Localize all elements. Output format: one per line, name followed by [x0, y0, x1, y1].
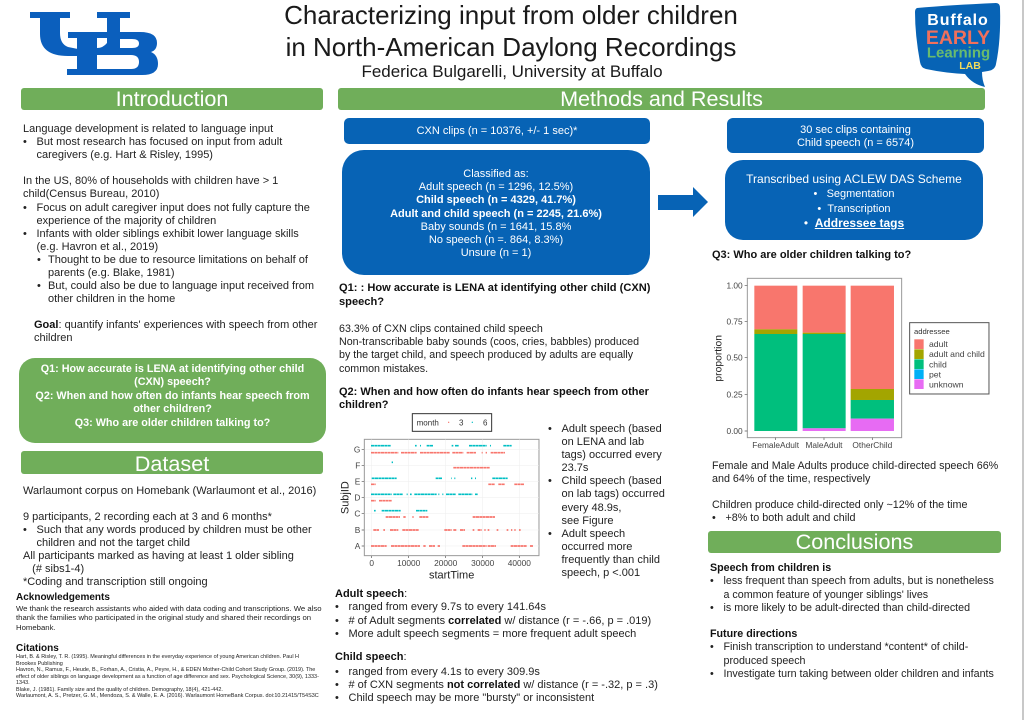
callout: research questions: Q2: When and how often do infants hear speech from — [35, 390, 310, 402]
legend: addressee: addressee — [914, 327, 950, 336]
text block: child speech: Child speech may be more "bursty" or inconsistent — [348, 692, 594, 704]
text block: introduction: caregivers (e.g. Hart & Risley, 1995) — [36, 149, 213, 161]
text block: chart notes: occurred more — [562, 541, 632, 553]
text block: chart notes: on lab tags) occurred — [562, 488, 665, 500]
text block: speech from children: is more likely to be adult-directed than child-directed — [724, 602, 970, 614]
scatter chart: speech by subject over time: 20000 — [434, 558, 458, 568]
text block: introduction: Thought to be due to resource limitations on behalf of — [48, 254, 308, 266]
text block: dataset: children and not the target child — [36, 537, 190, 549]
scatter chart: speech by subject over time: G — [354, 444, 360, 454]
box: 30 sec clips: Child speech (n = 6574) — [797, 137, 914, 149]
scatter chart: speech by subject over time: startTime — [429, 569, 474, 581]
box: classification: Baby sounds (n = 1641, 15.8% — [421, 221, 571, 233]
text block: introduction: child(Census Bureau, 2010) — [23, 188, 159, 200]
box: 30 sec clips — [727, 118, 984, 153]
scatter chart: speech by subject over time: A — [355, 541, 361, 551]
text block: chart notes: Adult speech — [562, 528, 625, 540]
box: classification: Child speech (n = 4329, 41.7%) — [416, 194, 576, 206]
scatter chart: speech by subject over time: E — [355, 477, 361, 487]
text block: speech from children: a common feature of younger siblings' lives — [724, 589, 928, 601]
heading: Q3: Q3: Who are older children talking to? — [712, 249, 911, 261]
box: classification: Adult speech (n = 1296, 12.5%) — [419, 181, 573, 193]
bar chart: addressee proportion: OtherChild — [852, 440, 893, 450]
text block: child speech: # of CXN segments not correlated w/ distance (r = -.32, p = .3) — [348, 679, 658, 691]
text block: chart notes: on LENA and lab — [562, 436, 644, 448]
heading: Citations: Citations — [16, 643, 59, 654]
text block: citations: 1343. — [16, 680, 30, 686]
scatter chart: speech by subject over time: 10000 — [397, 558, 421, 568]
text block: future directions — [710, 628, 994, 680]
text block: speech from children: Speech from children is — [710, 562, 831, 574]
bar chart: addressee proportion: 1.00 — [726, 281, 743, 291]
text block: adult speech — [335, 588, 651, 640]
text block: Q1 answer — [339, 323, 639, 375]
logo: Buffalo Early Learning Lab: Buffalo — [927, 12, 989, 29]
box: CXN clips — [344, 118, 650, 144]
text block: introduction: But most research has focused on input from adult — [36, 136, 282, 148]
box: classification: Adult and child speech (n = 2245, 21.6%) — [390, 208, 602, 220]
text block: citations: Brookes Publishing — [16, 660, 63, 666]
box: classification: No speech (n =. 864, 8.3%) — [429, 234, 563, 246]
text block: child speech — [335, 651, 658, 704]
scatter chart: speech by subject over time: B — [355, 525, 361, 535]
text block: citations: Havron, N., Ramus, F., Heude, B., Forhan, A., Cristia, A., Peyre, H., & EDEN Mother-Child Cohort Study Group. (2019). The — [16, 667, 315, 673]
text block: future directions: Investigate turn taking between older children and infants — [724, 668, 994, 680]
text block: chart notes: Child speech (based — [562, 475, 662, 487]
heading: Q1: Q1: : How accurate is LENA at identifying other child (CXN) — [339, 282, 650, 294]
text block: Q3 answer: and 64% of the time, respectively — [712, 472, 870, 484]
heading: Introduction — [21, 88, 323, 110]
text block: introduction: Language development is related to language input — [23, 123, 273, 135]
legend: month — [412, 414, 492, 431]
text block: Q1 answer: 63.3% of CXN clips contained child speech — [339, 323, 543, 335]
legend: addressee: adult and child — [929, 349, 985, 359]
bar chart: addressee proportion: FemaleAdult — [752, 440, 800, 450]
text block: introduction: Infants with older siblings exhibit lower language skills — [36, 228, 299, 240]
text block: dataset — [23, 485, 316, 588]
legend: addressee: unknown — [929, 380, 964, 390]
heading: Q1 — [339, 282, 650, 308]
box: transcription: • Segmentation — [814, 188, 894, 200]
text block: introduction: parents (e.g. Blake, 1981) — [48, 267, 175, 279]
scatter chart: speech by subject over time: 30000 — [471, 558, 495, 568]
heading: Conclusions: Conclusions — [796, 529, 913, 554]
text block: speech from children — [710, 562, 994, 614]
callout: research questions — [19, 358, 326, 443]
text block: Q3 answer — [712, 460, 998, 524]
box: CXN clips: CXN clips (n = 10376, +/- 1 sec)* — [417, 125, 577, 137]
text block: chart notes: tags) occurred every — [562, 449, 662, 461]
bar chart: addressee proportion: 0.75 — [726, 317, 743, 327]
heading: Methods and Results — [338, 88, 985, 110]
bar chart: addressee proportion: 0.00 — [726, 426, 743, 436]
logo: Buffalo Early Learning Lab — [915, 3, 1000, 87]
heading: Conclusions — [708, 531, 1001, 553]
text block: Q1 answer: by the target child, and speech produced by adults are equally — [339, 349, 633, 361]
heading: Methods and Results: Methods and Results — [560, 86, 763, 111]
text block: citations — [16, 654, 319, 699]
callout: research questions: (CXN) speech? — [134, 376, 211, 388]
box: 30 sec clips: 30 sec clips containing — [800, 124, 911, 136]
scatter chart: speech by subject over time: 0 — [369, 558, 374, 568]
heading: Dataset: Dataset — [135, 451, 209, 476]
text block: future directions: Finish transcription to understand *content* of child- — [724, 641, 968, 653]
text block: introduction: But, could also be due to language input received from — [48, 280, 314, 292]
text block: goal: Goal: quantify infants' experiences with speech from other — [34, 319, 317, 331]
text block: chart notes: frequently than child — [562, 554, 660, 566]
text block: chart notes: every 48.9s, — [562, 502, 621, 514]
text block: adult speech: Adult speech: — [335, 588, 407, 600]
logo: Buffalo Early Learning Lab: Learning — [927, 44, 990, 62]
legend: month: month — [417, 418, 439, 427]
text block: citations: effect of older siblings on language development as a function of age difference and sex. Psychological Science, 30(9), 1333- — [16, 674, 319, 680]
text block: Q1 answer: common mistakes. — [339, 363, 428, 375]
heading: Dataset — [21, 451, 323, 474]
text block: introduction: other children in the home — [48, 293, 175, 305]
text block: chart notes: Adult speech (based — [562, 423, 662, 435]
legend: addressee — [910, 323, 989, 394]
box: transcription — [725, 160, 983, 240]
text block: acknowledgements: Homebank. — [16, 623, 56, 632]
callout: research questions: Q3: Who are older children talking to? — [75, 417, 270, 429]
heading: Q2: Q2: When and how often do infants hear speech from other — [339, 386, 649, 398]
scatter chart: speech by subject over time: C — [354, 509, 360, 519]
text block: dataset: 9 participants, 2 recording each at 3 and 6 months* All participants marked as having at least 1 older sibling — [23, 511, 294, 562]
text block: introduction: Focus on adult caregiver input does not fully capture the — [36, 202, 310, 214]
text block: citations: Hart, B. & Risley, T. R. (1995). Meaningful differences in the everyday experience of young American children. Paul H — [16, 654, 299, 660]
box: classification: Unsure (n = 1) — [461, 247, 531, 259]
text block: Q3 answer: Female and Male Adults produce child-directed speech 66% — [712, 460, 998, 472]
heading: Q1: speech? — [339, 296, 384, 308]
text block: Q3 answer: +8% to both adult and child — [726, 512, 856, 524]
bar chart: addressee proportion: MaleAdult — [805, 440, 843, 450]
text block: introduction: (e.g. Havron et al., 2019) — [36, 241, 158, 253]
text block: dataset: Such that any words produced by children must be other — [36, 524, 312, 536]
text block: citations: Blake, J. (1981). Family size and the quality of children. Demography, 18(4), 421-442. — [16, 686, 223, 692]
bar chart: addressee proportion: 0.25 — [726, 390, 743, 400]
title: Characterizing input from older children — [284, 0, 738, 30]
text block: goal — [34, 319, 318, 344]
text block: introduction — [23, 123, 314, 305]
text block: dataset: *Coding and transcription still ongoing — [23, 576, 208, 588]
text block: citations: Warlaumont, A. S., Pretzer, G. M., Mendoza, S. & Walle, E. A. (2016). Warlaumont HomeBank Corpus. doi:10.21415/T54S3C — [16, 693, 319, 699]
callout: research questions: other children? — [133, 403, 212, 415]
text block: dataset: (# sibs1-4) — [32, 563, 84, 575]
text block: child speech: Child speech: — [335, 651, 407, 663]
text block: introduction: experience of the majority of children — [36, 215, 216, 227]
legend: month: 6 — [483, 418, 488, 427]
text block: adult speech: ranged from every 9.7s to every 141.64s — [348, 601, 546, 613]
scatter chart: speech by subject over time: F — [355, 460, 360, 470]
text block: acknowledgements: We thank the research assistants who aided with data coding and transcriptions. We also — [16, 604, 322, 613]
heading: Acknowledgements: Acknowledgements — [16, 592, 110, 603]
callout: research questions: Q1: How accurate is LENA at identifying other child — [41, 363, 304, 375]
bar chart: addressee proportion: 0.50 — [726, 353, 743, 363]
legend: addressee: child — [929, 359, 947, 369]
text block: speech from children: less frequent than speech from adults, but is nonetheless — [724, 575, 994, 587]
text block: acknowledgements — [16, 604, 322, 632]
box: transcription: Transcribed using ACLEW DAS Scheme — [746, 172, 962, 186]
text block: chart notes: see Figure — [562, 515, 613, 527]
box: transcription: • Transcription — [817, 203, 891, 215]
heading: Q2 — [339, 386, 649, 411]
text block: future directions: Future directions — [710, 628, 797, 640]
logo: Buffalo Early Learning Lab: LAB — [959, 60, 981, 72]
text block: Q1 answer: Non-transcribable baby sounds (coos, cries, babbles) produced — [339, 336, 639, 348]
text block: chart notes — [548, 423, 665, 579]
text block: Q3 answer: Children produce child-directed only ~12% of the time — [712, 498, 967, 510]
scatter chart: speech by subject over time: SubjID — [340, 481, 352, 514]
legend: addressee: adult — [929, 339, 948, 349]
title: in North-American Daylong Recordings — [286, 32, 736, 62]
scatter chart: speech by subject over time: D — [354, 493, 360, 503]
text block: introduction: In the US, 80% of households with children have > 1 — [23, 175, 278, 187]
legend: addressee: pet — [929, 370, 942, 380]
scatter chart: speech by subject over time: 40000 — [508, 558, 531, 568]
text block: goal: children — [34, 332, 73, 344]
text block: future directions: produced speech — [724, 655, 806, 667]
heading: Q2: children? — [339, 399, 389, 411]
logo: University at Buffalo UB — [30, 12, 158, 75]
legend: month: 3 — [459, 418, 464, 427]
text block: adult speech: # of Adult segments correlated w/ distance (r = -.66, p = .019) — [348, 615, 651, 627]
arrow — [658, 187, 708, 217]
heading: Introduction: Introduction — [116, 86, 228, 111]
box: transcription: • Addressee tags — [804, 216, 904, 230]
logo: Buffalo Early Learning Lab: EARLY — [926, 27, 990, 49]
text block: acknowledgements: thank the families who participated in the original study and shared their recordings on — [16, 613, 311, 622]
text block: child speech: ranged from every 4.1s to every 309.9s — [348, 666, 540, 678]
bar chart: addressee proportion: proportion — [714, 335, 725, 382]
title — [284, 0, 738, 62]
text block: dataset: Warlaumont corpus on Homebank (Warlaumont et al., 2016) — [23, 485, 316, 497]
box: classification — [342, 150, 650, 275]
text block: chart notes: speech, p <.001 — [562, 567, 640, 579]
text block: adult speech: More adult speech segments = more frequent adult speech — [348, 628, 636, 640]
author line: Federica Bulgarelli, University at Buffalo — [361, 62, 663, 81]
text block: chart notes: 23.7s — [562, 462, 588, 474]
box: classification: Classified as: — [463, 168, 529, 180]
